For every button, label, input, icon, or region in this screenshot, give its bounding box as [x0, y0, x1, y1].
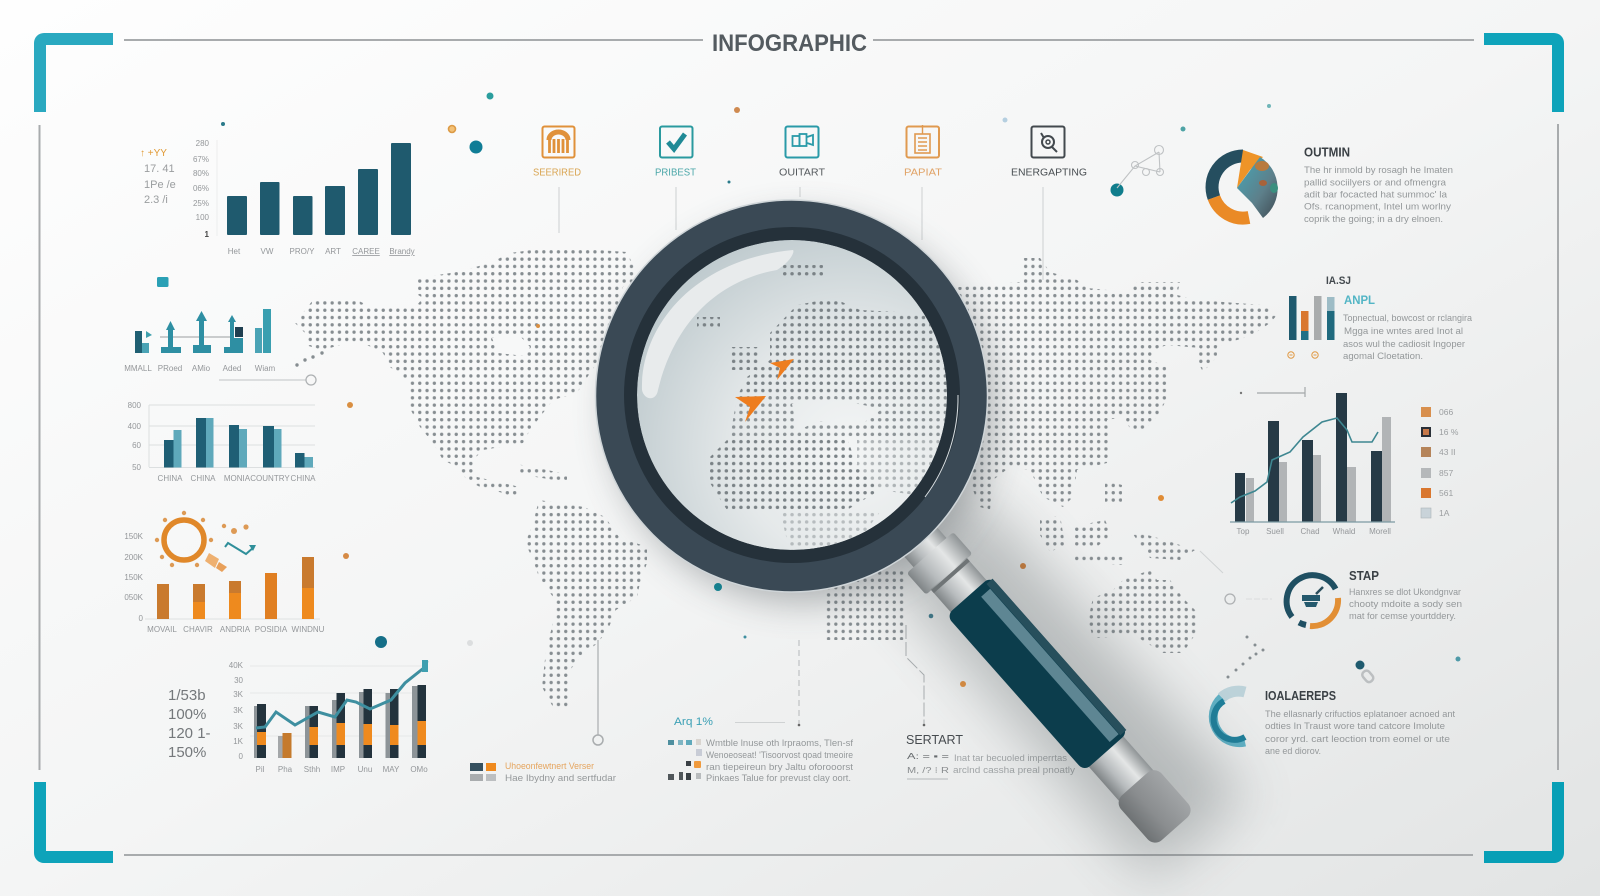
- chart: paired bars: COUNTRY: [250, 474, 290, 483]
- axis labels: 25%: [193, 199, 209, 208]
- lens: dotted map: [697, 265, 950, 552]
- chart: orange bars with sun icon: WINDNU: [292, 625, 325, 634]
- chart: orange bars with sun icon: CHAVIR: [183, 625, 213, 634]
- icon: temple: [542, 126, 574, 158]
- percent list: [168, 687, 211, 761]
- label: seerired: SEERIRED: [533, 168, 581, 178]
- chart: orange bars with sun icon: 0: [139, 614, 144, 623]
- chart: stacked bars with line: OMo: [410, 765, 428, 774]
- icon: orange gear magnifier: [155, 511, 256, 572]
- chart: right bars with line: Suell: [1266, 527, 1284, 536]
- chart: paired bars: CHINA: [291, 474, 316, 483]
- lens: [637, 240, 950, 552]
- legend: 1A: [1439, 508, 1450, 518]
- icon: document: [906, 125, 939, 158]
- legend: bottom left: [470, 761, 616, 784]
- dotted world map: [295, 247, 1277, 707]
- panel: outmin donut and text: [1212, 146, 1453, 225]
- chart: stacked bars with line: Sthh: [304, 765, 320, 774]
- chart: stacked bars with line: 1K: [233, 737, 244, 746]
- legend numbers: 1Pe /e: [144, 179, 176, 191]
- chart: dark teal bars: PRO/Y: [290, 247, 315, 256]
- percent list: 150%: [168, 744, 206, 761]
- panel: stap ring and text: [1225, 569, 1462, 626]
- panel: anpl bars and text: Topnectual, bowcost or rclangira: [1343, 313, 1473, 324]
- chart: teal arrows: Wiam: [255, 364, 276, 373]
- legend: [1421, 407, 1459, 518]
- inner ring: [624, 227, 960, 563]
- label: outart: OUITART: [779, 168, 825, 178]
- chart: stacked bars with line: Pha: [278, 765, 293, 774]
- legend: bottom left: Uhoeonfewtnert Verser: [505, 761, 594, 771]
- legend numbers: [140, 148, 176, 206]
- panel: outmin donut and text: adit bar focacted hat summoc' la: [1304, 190, 1448, 200]
- icon: molecule: [1117, 146, 1164, 188]
- chart: paired bars: [128, 401, 316, 483]
- chart: right bars with line: Whald: [1333, 527, 1355, 536]
- axis labels: 100: [196, 213, 210, 222]
- legend numbers: ↑ +YY: [140, 148, 167, 159]
- mini bars: [1288, 296, 1334, 358]
- icon: check: [660, 126, 692, 158]
- chart: paired bars: CHINA: [191, 474, 216, 483]
- panel: outmin donut and text: OUTMIN: [1304, 146, 1350, 160]
- legend: 561: [1439, 488, 1453, 498]
- chart: right bars with line: Top: [1237, 527, 1250, 536]
- panel: stap ring and text: STAP: [1349, 569, 1379, 583]
- connector lines: [559, 187, 1043, 745]
- label: energapting: ENERGAPTING: [1011, 168, 1087, 178]
- chart: right bars with line: Chad: [1300, 527, 1320, 536]
- panel: outmin donut and text: pallid sociilyers or and ofmengra: [1304, 178, 1447, 188]
- percent list: 120 1-: [168, 725, 211, 742]
- chart: orange bars with sun icon: POSIDIA: [255, 625, 288, 634]
- percent list: 1/53b: [168, 687, 206, 704]
- chart: stacked bars with line: 0: [239, 752, 244, 761]
- icon: small teal tag: [157, 277, 168, 287]
- axis labels: 280: [196, 139, 210, 148]
- chart: orange bars with sun icon: MOVAIL: [147, 625, 177, 634]
- legend: 857: [1439, 468, 1453, 478]
- chart: dark teal bars: CAREE: [352, 247, 380, 256]
- outer ring: [596, 200, 988, 592]
- chart: paired bars: 60: [132, 441, 142, 450]
- handle: [891, 514, 1198, 849]
- panel: anpl bars and text: Mgga ine wntes ared Inot al: [1344, 326, 1463, 337]
- text block: bottom centre: Wmtble lnuse oth lrpraoms, Tlen-sf: [706, 738, 853, 749]
- chart: paired bars: 50: [132, 463, 142, 472]
- panel: outmin donut and text: coprik the going; in a dry elnoen.: [1304, 214, 1443, 225]
- chart: paired bars: CHINA: [158, 474, 183, 483]
- label: pribest: PRIBEST: [655, 168, 696, 178]
- legend numbers: 17. 41: [144, 163, 175, 175]
- legend: 43 II: [1439, 447, 1456, 457]
- panel: anpl bars and text: [1288, 275, 1473, 362]
- icon: pin and chain: [1356, 660, 1375, 684]
- legend: 066: [1439, 407, 1453, 417]
- chart: dark teal bars: [140, 139, 415, 256]
- panel: ioalaereps crescent and text: ane ed diorov.: [1265, 746, 1321, 757]
- panel: ioalaereps crescent and text: odties In Traust wore tand catcore Imolute: [1265, 721, 1445, 732]
- chart: stacked bars with line: 40K: [229, 661, 244, 670]
- chart: dark teal bars: ART: [325, 247, 341, 256]
- panel: ioalaereps crescent and text: IOALAEREPS: [1265, 689, 1336, 703]
- chart: stacked bars with line: Unu: [358, 765, 372, 774]
- chart: paired bars: MONIA: [224, 474, 251, 483]
- chart: stacked bars with line: [229, 660, 428, 774]
- axis labels: 06%: [193, 184, 209, 193]
- chart: teal arrows: Aded: [223, 364, 241, 373]
- panel: ioalaereps crescent and text: The ellasnarly crifuctios eplatanoer acnoed ant: [1265, 709, 1455, 720]
- text block: bottom centre: Arq 1%: [674, 716, 713, 728]
- panel: anpl bars and text: agomal Cloetation.: [1343, 351, 1423, 362]
- chart: stacked bars with line: 3K: [233, 722, 244, 731]
- accent dots: [221, 92, 1460, 687]
- panel: stap ring and text: Hanxres se dlot Ukondgnvar: [1349, 587, 1461, 598]
- bars: [227, 143, 411, 235]
- chart: stacked bars with line: 3K: [233, 706, 244, 715]
- chart: dark teal bars: VW: [261, 247, 274, 256]
- chart: stacked bars with line: 30: [234, 676, 244, 685]
- ring icon: [1287, 575, 1338, 626]
- chart: teal arrows: [124, 309, 316, 385]
- shadows: [610, 218, 1245, 879]
- chart: stacked bars with line: Pil: [256, 765, 265, 774]
- percent list: 100%: [168, 706, 206, 723]
- panel: stap ring and text: chooty mdoite a sody sen: [1349, 599, 1462, 610]
- chart: teal arrows: MMALL: [124, 364, 152, 373]
- chart: stacked bars with line: 3K: [233, 690, 244, 699]
- chart: orange bars with sun icon: 150K: [124, 532, 144, 541]
- chart: teal arrows: AMio: [192, 364, 211, 373]
- label: papiat: PAPIAT: [904, 168, 942, 178]
- legend: bottom left: Hae Ibydny and sertfudar: [505, 773, 616, 784]
- text block: bottom centre: [668, 716, 853, 784]
- magnifying glass: [596, 200, 1245, 879]
- crescent icon: [1213, 691, 1245, 743]
- panel: ioalaereps crescent and text: coror yrd. cart leoction trom eomel or ute: [1265, 734, 1450, 745]
- chart: teal arrows: PRoed: [158, 364, 182, 373]
- panel: outmin donut and text: Ofs. rcanopment, Intel um worlny: [1304, 202, 1451, 212]
- text block: bottom centre: Wenoeoseat! 'Tisoorvost qoad tmeoire: [706, 750, 853, 761]
- text block: sertart: M, /? ⁝ R: [907, 765, 949, 775]
- text block: sertart: Inat tar becuoled imperrtas: [954, 753, 1068, 763]
- chart: orange bars with sun icon: ANDRIA: [220, 625, 251, 634]
- panel: anpl bars and text: asos wul the cadiosit Ingoper: [1343, 339, 1465, 350]
- legend numbers: 2.3 /i: [144, 194, 168, 206]
- panel: stap ring and text: mat for cemse yourtddery.: [1349, 611, 1456, 622]
- panel: outmin donut and text: The hr inmold by rosagh he Imaten: [1304, 165, 1453, 176]
- chart: right bars with line: Morell: [1369, 527, 1391, 536]
- title: INFOGRAPHIC: [712, 30, 867, 57]
- text block: sertart: arclnd cassha preal pnoatly: [953, 765, 1076, 775]
- panel: ioalaereps crescent and text: [1213, 689, 1455, 757]
- orange arrows: [735, 359, 794, 422]
- panel: anpl bars and text: ANPL: [1344, 293, 1375, 307]
- text block: bottom centre: ran tiepeireun bry Jaltu oforooorst: [706, 762, 853, 773]
- chart: stacked bars with line: MAY: [383, 765, 400, 774]
- icon row: [533, 125, 1087, 178]
- axis labels: [193, 139, 210, 239]
- chart: paired bars: 400: [128, 422, 142, 431]
- chart: orange bars with sun icon: 150K: [124, 573, 144, 582]
- chart: orange bars with sun icon: 050K: [124, 593, 144, 602]
- chart: right bars with line: [1230, 387, 1459, 536]
- chart: orange bars with sun icon: [124, 511, 325, 634]
- chart: dark teal bars: Het: [228, 247, 241, 256]
- icon: search: [1032, 126, 1064, 158]
- lens highlight: [642, 250, 793, 398]
- text block: bottom centre: Pinkaes Talue for prevust clay oort.: [706, 773, 851, 784]
- axis labels: 67%: [193, 155, 209, 164]
- icon: camera: [786, 126, 818, 158]
- chart: dark teal bars: Brandy: [389, 247, 415, 256]
- text block: sertart: [906, 732, 1076, 779]
- donut chart: [1212, 150, 1278, 218]
- text block: sertart: SERTART: [906, 732, 963, 747]
- chart: paired bars: 800: [128, 401, 142, 410]
- text block: sertart: A: = ▪ =: [907, 751, 949, 761]
- chart: orange bars with sun icon: 200K: [124, 553, 144, 562]
- legend: 16 %: [1439, 427, 1459, 437]
- chart: stacked bars with line: IMP: [331, 765, 345, 774]
- axis labels: 80%: [193, 169, 209, 178]
- panel: anpl bars and text: IA.SJ: [1326, 275, 1351, 287]
- axis labels: 1: [205, 230, 210, 239]
